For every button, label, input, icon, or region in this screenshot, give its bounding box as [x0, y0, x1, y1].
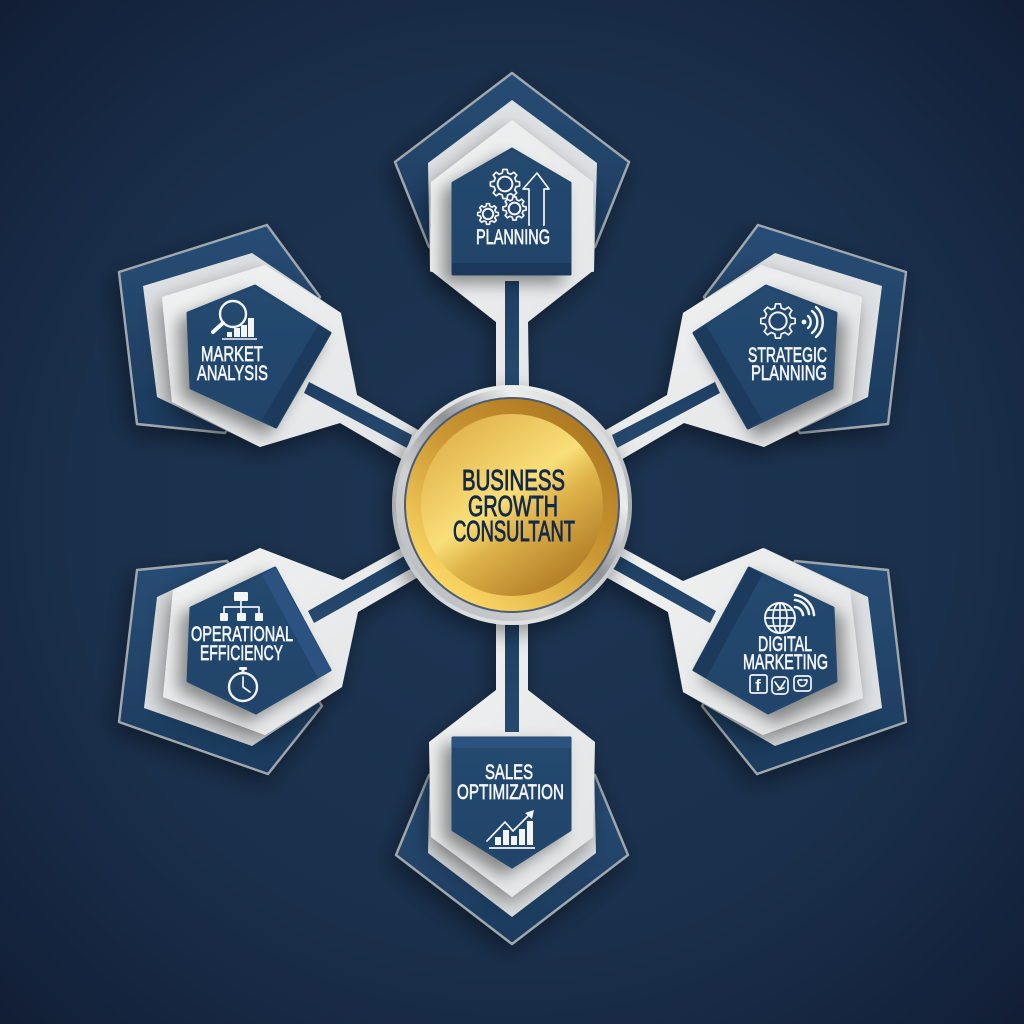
outer navy pentagon: sales optimization	[396, 775, 628, 944]
outer navy pentagon: planning	[395, 73, 629, 247]
card edge band: operational efficiency	[262, 567, 331, 678]
icon: gears and arrow	[478, 169, 549, 225]
label: market analysis	[197, 343, 268, 385]
module: sales optimization	[396, 622, 628, 944]
white plate and connector: operational efficiency	[163, 546, 420, 735]
white plate and connector: planning	[430, 120, 594, 390]
icon: social media: f	[755, 676, 761, 695]
connector stem: digital marketing	[610, 554, 716, 623]
card edge band: strategic planning	[693, 325, 762, 429]
gold disc	[421, 414, 603, 596]
middle layer: market analysis	[143, 253, 341, 447]
connector stem: sales optimization	[505, 622, 519, 732]
module: planning	[395, 73, 629, 390]
label: operational efficiency	[191, 623, 293, 665]
white plate and connector: sales optimization	[429, 622, 595, 897]
label: operational efficiency: OPERATIONAL	[191, 623, 293, 646]
outer navy pentagon: strategic planning	[704, 225, 906, 433]
card: strategic planning	[694, 286, 836, 428]
icon: growth chart	[487, 810, 535, 848]
card: planning	[453, 149, 570, 274]
module: digital marketing	[604, 546, 906, 774]
card edge band: market analysis	[262, 325, 331, 428]
module: strategic planning	[604, 225, 906, 461]
label: sales optimization	[457, 761, 564, 804]
icon: social media	[750, 675, 811, 695]
outer navy pentagon: operational efficiency	[119, 561, 322, 774]
silver ring	[392, 385, 632, 625]
label: sales optimization: SALES	[485, 761, 533, 784]
white plate and connector: digital marketing	[604, 546, 863, 735]
connector stem: planning	[505, 281, 519, 387]
card: operational efficiency	[188, 568, 330, 713]
silver ring sheen	[396, 389, 628, 621]
card edge band: digital marketing	[693, 567, 762, 678]
icon: stopwatch	[229, 667, 257, 701]
outer navy pentagon: market analysis	[119, 225, 320, 433]
icon: globe and signal	[765, 595, 814, 633]
label: market analysis: ANALYSIS	[197, 362, 268, 385]
white plate and connector: strategic planning	[604, 265, 862, 461]
middle layer: strategic planning	[683, 253, 882, 447]
module: operational efficiency	[119, 546, 420, 774]
card: market analysis	[188, 286, 330, 427]
card: digital marketing	[694, 568, 836, 713]
label: digital marketing	[743, 633, 828, 674]
module: market analysis	[119, 225, 420, 461]
outer navy pentagon: digital marketing	[702, 561, 906, 774]
label: strategic planning	[748, 344, 827, 385]
card: sales optimization	[453, 738, 570, 867]
label: strategic planning: STRATEGIC	[748, 344, 827, 367]
label: planning: PLANNING	[476, 226, 550, 249]
icon: org chart	[220, 592, 263, 621]
middle layer: sales optimization	[428, 760, 596, 917]
icon: gear and signal	[761, 304, 823, 338]
label: digital marketing: DIGITAL	[758, 633, 812, 656]
title: business growth consultant: BUSINESS	[462, 465, 565, 497]
icon: magnifier and bars	[213, 301, 257, 339]
connector stem: market analysis	[304, 382, 412, 448]
dark inner ring	[404, 397, 620, 613]
middle layer: planning	[428, 100, 597, 272]
card base band: planning	[452, 263, 571, 275]
middle layer: operational efficiency	[144, 548, 342, 746]
title: business growth consultant: CONSULTANT	[453, 516, 575, 548]
middle layer: digital marketing	[683, 548, 882, 746]
label: strategic planning: PLANNING	[751, 362, 827, 385]
title: business growth consultant: GROWTH	[468, 491, 558, 523]
white plate and connector: market analysis	[162, 265, 420, 461]
gold bevel	[406, 399, 618, 611]
label: market analysis: MARKET	[201, 343, 263, 366]
card top band: sales optimization	[452, 737, 571, 748]
label: sales optimization: OPTIMIZATION	[457, 781, 564, 804]
label: operational efficiency: EFFICIENCY	[200, 642, 283, 665]
label: digital marketing: MARKETING	[743, 651, 828, 674]
connector stem: strategic planning	[612, 382, 720, 448]
central medallion	[392, 385, 632, 625]
title: business growth consultant	[453, 465, 575, 548]
connector stem: operational efficiency	[308, 554, 414, 623]
